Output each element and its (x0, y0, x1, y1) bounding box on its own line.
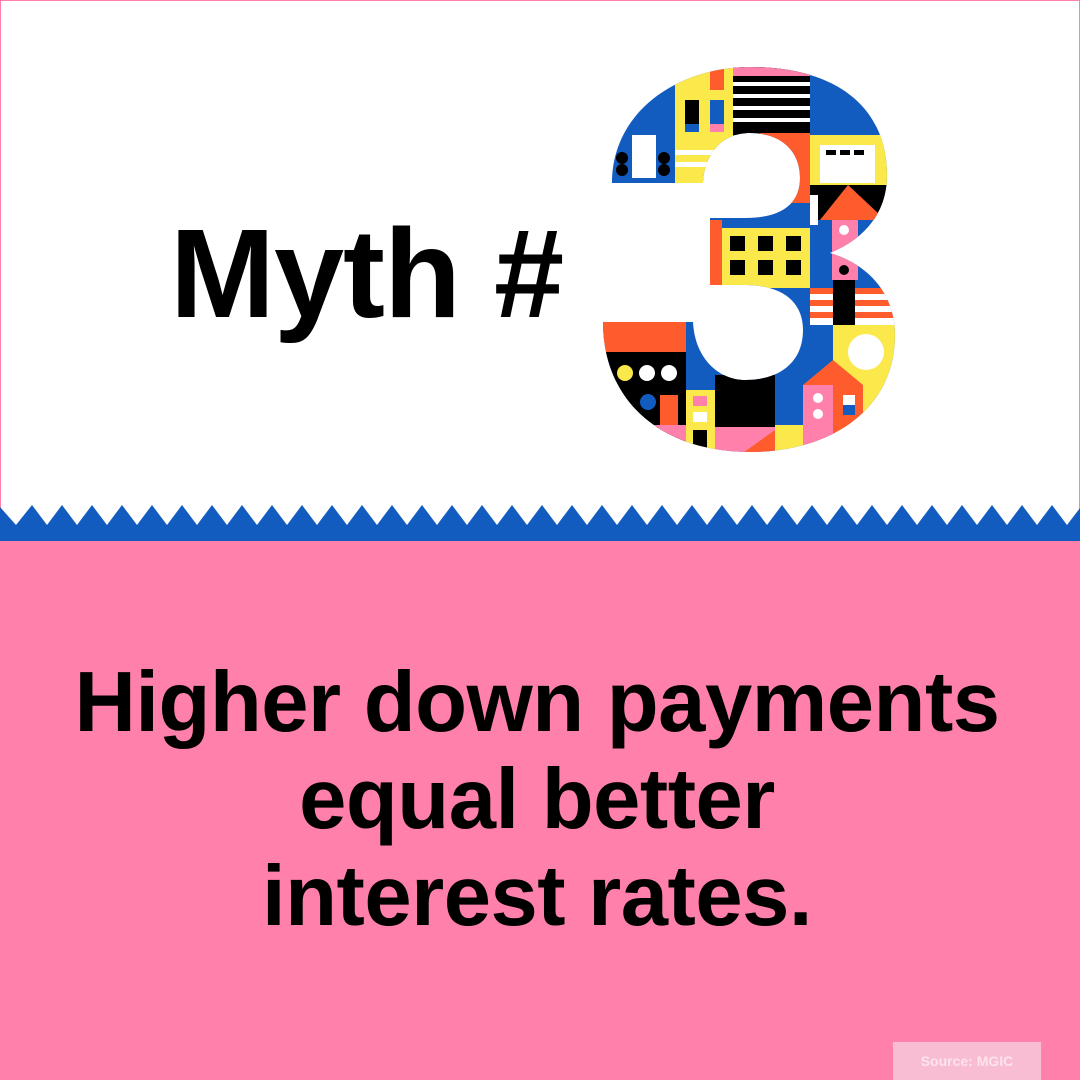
big number 3 illustration (603, 67, 895, 452)
source label (893, 1042, 1041, 1080)
title: Myth #: Myth # (170, 203, 563, 344)
top white panel (1, 1, 1079, 531)
main statement text: Higher down payments (74, 655, 1000, 750)
main statement text: interest rates. (262, 849, 812, 944)
main statement text: equal better (299, 752, 775, 847)
source label: Source: MGIC (921, 1053, 1013, 1069)
main statement text (74, 655, 1000, 944)
zigzag divider (0, 505, 1080, 541)
